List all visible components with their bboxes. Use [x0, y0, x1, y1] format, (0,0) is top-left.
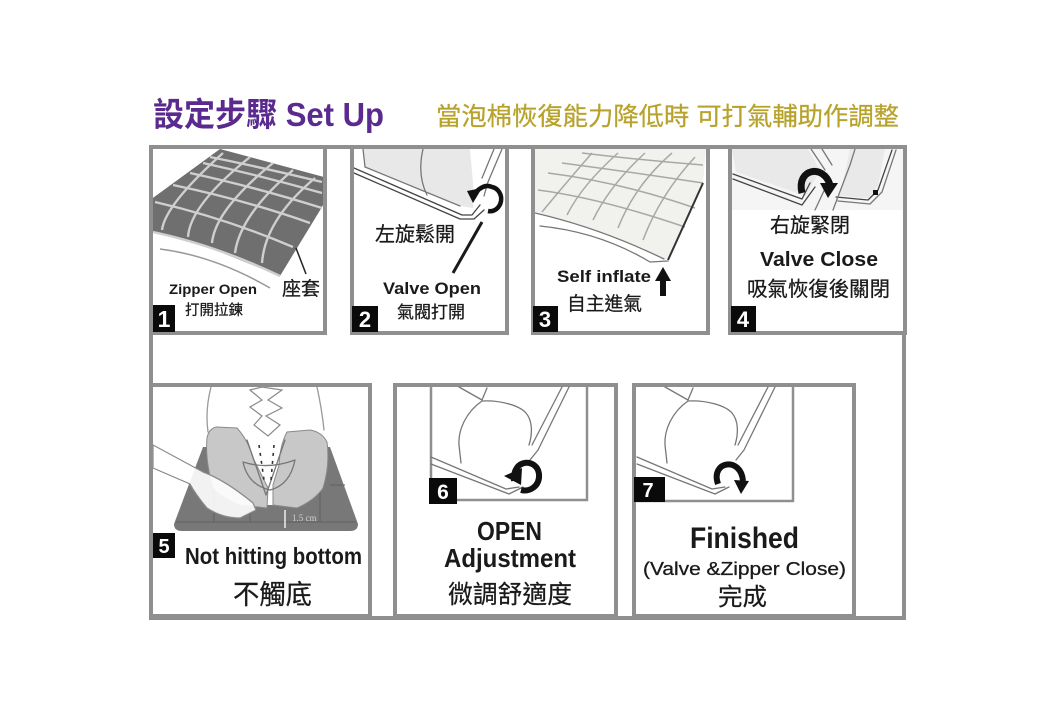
label: valve open Chinese: 氣閥打開	[397, 303, 465, 322]
badge 1: 1	[158, 306, 171, 332]
badge 7	[634, 477, 665, 502]
outer frame	[151, 147, 904, 618]
label: close after inflating: 吸氣恢復後關閉	[747, 278, 890, 301]
badge 5	[153, 533, 175, 558]
label: self inflate Chinese: 自主進氣	[567, 293, 642, 315]
label: open zipper Chinese: 打開拉鍊	[185, 302, 243, 319]
icon: counter-clockwise arrow	[467, 186, 501, 211]
icon: clockwise arrow	[801, 171, 838, 198]
badge 4	[731, 306, 756, 332]
panel 6: open adjustment	[395, 385, 616, 616]
subtitle: foam recovery note: 當泡棉恢復能力降低時 可打氣輔助作調整	[436, 103, 899, 131]
label: turn left to loosen: 左旋鬆開	[375, 223, 455, 246]
illustration: cushion corner with closed valve	[732, 149, 903, 210]
label: seat cover: 座套	[282, 278, 320, 300]
illustration: cushion corner and valve	[431, 387, 569, 494]
label: finished Chinese: 完成	[718, 584, 767, 611]
label: Zipper Open: Zipper Open	[169, 281, 257, 297]
panel 2: valve open	[352, 147, 507, 333]
badge 7: 7	[642, 480, 654, 502]
panel 1: zipper open	[150, 147, 335, 333]
label: valve and zipper close: (Valve &Zipper Close)	[643, 559, 846, 579]
title: Set Up heading: 設定步驟 Set Up	[153, 96, 384, 133]
label: Valve Close: Valve Close	[760, 249, 878, 271]
illustration: cushion corner with valve	[354, 149, 502, 219]
label: OPEN: OPEN	[477, 516, 542, 546]
label: Self inflate: Self inflate	[557, 267, 651, 286]
label: Valve Open: Valve Open	[383, 279, 481, 298]
badge 4: 4	[737, 307, 750, 332]
badge 3	[533, 306, 558, 332]
leader line to valve	[453, 222, 482, 273]
badge 6: 6	[437, 481, 449, 504]
inset illustration frame	[431, 385, 587, 500]
badge 2	[352, 306, 378, 332]
inset illustration frame	[634, 385, 793, 501]
label: adjust comfort Chinese: 微調舒適度	[448, 581, 572, 609]
label: Finished: Finished	[690, 522, 799, 555]
badge 3: 3	[539, 307, 551, 332]
icon: up arrow	[655, 267, 671, 296]
illustration: inflated light cushion	[535, 149, 706, 262]
label: turn right to tighten: 右旋緊閉	[770, 214, 850, 237]
badge 6	[429, 478, 457, 504]
label: Not hitting bottom: Not hitting bottom	[185, 543, 362, 569]
label: not hitting bottom Chinese: 不觸底	[233, 580, 312, 610]
panel 4: valve close	[730, 147, 905, 333]
panel 3: self inflate	[533, 147, 708, 333]
badge 5: 5	[158, 536, 170, 558]
icon: valve arrow	[504, 463, 539, 490]
leader line to seat cover	[296, 248, 306, 274]
panel 7: finished	[634, 385, 854, 616]
zipper arrow line	[160, 249, 270, 288]
badge 1	[153, 305, 175, 332]
illustration: cushion corner and valve	[637, 387, 775, 494]
panel 5: not hitting bottom	[151, 385, 370, 616]
illustration: pelvis on cushion with hand	[153, 387, 358, 531]
label: Adjustment: Adjustment	[444, 543, 576, 573]
badge 2: 2	[359, 307, 371, 332]
label: 1.5 cm depth: 1.5 cm	[292, 513, 316, 523]
illustration: dark quilted cushion cover	[150, 149, 335, 276]
icon: clockwise valve arrow	[717, 464, 749, 494]
